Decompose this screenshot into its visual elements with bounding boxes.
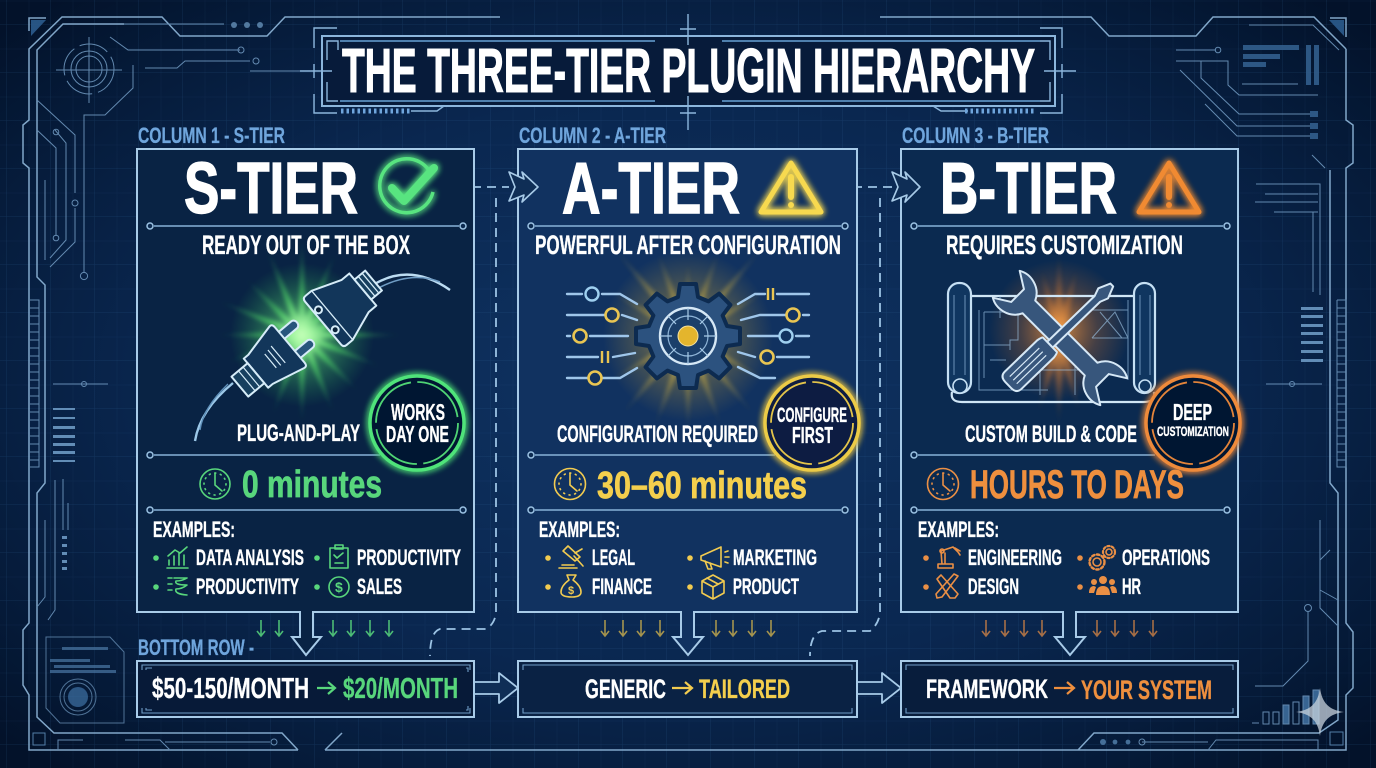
examples list: EXAMPLES:: [153, 517, 235, 542]
bottom box: cost: [137, 661, 474, 717]
setup time: [928, 463, 1184, 507]
left ladder strip: [30, 300, 39, 467]
bottom box: framework to your system: FRAMEWORK: [926, 674, 1048, 704]
setup time: 30–60 minutes: [597, 465, 807, 507]
icon: robot arm: [938, 547, 960, 568]
examples list: MARKETING: [733, 545, 817, 570]
gear: [636, 284, 740, 388]
examples list: HR: [1122, 574, 1141, 599]
small down arrows: B-tier: [982, 620, 1157, 636]
examples list: DATA ANALYSIS: [196, 545, 304, 570]
badge: deep customization: [1146, 376, 1240, 470]
illustration: blueprint and tools: [948, 251, 1155, 426]
caption: CONFIGURATION REQUIRED: [557, 421, 758, 448]
bottom box: generic to tailored: TAILORED: [699, 674, 790, 704]
icon: task list: [168, 578, 187, 595]
icon: box: [702, 575, 724, 599]
badge: works day one: DAY ONE: [386, 421, 449, 447]
panel: S-tier: [137, 149, 474, 655]
icon: green check circle: [380, 159, 434, 213]
examples list: [153, 517, 461, 599]
small down arrows: S-tier: [257, 620, 393, 636]
icon: people: [1089, 576, 1117, 595]
column label 1: COLUMN 1 - S-TIER: [138, 123, 285, 148]
S-tier heading: S-TIER: [184, 149, 358, 229]
bottom box: cost: $20/MONTH: [343, 673, 458, 705]
badge: deep customization: CUSTOMIZATION: [1157, 423, 1229, 439]
icon: megaphone: [701, 547, 729, 569]
flow arrow: A-tier to B-tier dashed: [810, 187, 892, 656]
icon: gavel: [559, 546, 583, 568]
bottom row label: BOTTOM ROW -: [138, 635, 254, 660]
flow arrow: S-tier to A-tier dashed: [430, 187, 509, 656]
icon: orange warning: [1139, 163, 1199, 212]
icon: clipboard: [330, 545, 348, 568]
bottom box: framework to your system: YOUR SYSTEM: [1081, 675, 1212, 705]
examples list: DESIGN: [968, 574, 1019, 599]
icon: money bag: [561, 575, 581, 597]
examples list: [539, 517, 817, 599]
setup time: [554, 465, 807, 507]
subtitle: POWERFUL AFTER CONFIGURATION: [535, 230, 841, 260]
chevron arrow into A-tier: [509, 172, 538, 202]
wrench: [991, 269, 1129, 407]
examples list: SALES: [357, 574, 402, 599]
A-tier heading: A-TIER: [562, 149, 740, 229]
arrow: cost to generic: [474, 673, 518, 703]
subtitle: REQUIRES CUSTOMIZATION: [946, 230, 1183, 260]
column label 3: COLUMN 3 - B-TIER: [902, 123, 1049, 148]
arrow: generic to framework: [857, 673, 901, 703]
illustration: gear and circuits: [567, 245, 809, 434]
examples list: PRODUCTIVITY: [357, 545, 461, 570]
icon: dollar: $: [335, 579, 343, 595]
examples list: FINANCE: [592, 574, 652, 599]
examples list: [918, 517, 1210, 599]
mini bar chart: [1252, 690, 1319, 724]
setup time: 0 minutes: [242, 464, 382, 506]
small down arrows: A-tier: [601, 620, 775, 636]
sparkle watermark: [1296, 688, 1344, 736]
bottom box: generic to tailored: GENERIC: [585, 674, 666, 704]
badge: configure first: CONFIGURE: [777, 404, 847, 427]
bottom box: framework to your system: [901, 661, 1238, 717]
icon: money bag: $: [568, 585, 574, 597]
caption: PLUG-AND-PLAY: [237, 420, 360, 447]
examples list: EXAMPLES:: [539, 517, 620, 542]
subtitle: READY OUT OF THE BOX: [202, 230, 410, 260]
column label 2: COLUMN 2 - A-TIER: [519, 123, 666, 148]
title banner: [300, 14, 1076, 130]
icon: dollar: [329, 577, 349, 597]
top right data block: [1243, 45, 1319, 139]
B-tier heading: B-TIER: [940, 149, 1117, 229]
icon: crossed ruler and pencil: [936, 574, 958, 598]
bottom left data panel: [46, 637, 124, 723]
icon: chart: [167, 547, 188, 568]
bottom box: generic to tailored: [518, 661, 857, 717]
examples list: EXAMPLES:: [918, 517, 999, 542]
badge: works day one: WORKS: [391, 399, 445, 425]
icon: gears: [1090, 546, 1115, 570]
chevron arrow into B-tier: [892, 172, 920, 202]
screwdriver: [1000, 276, 1120, 394]
examples list: LEGAL: [592, 545, 635, 570]
badge: works day one: [370, 376, 464, 470]
examples list: ENGINEERING: [968, 545, 1062, 570]
icon: yellow warning: [761, 163, 821, 212]
caption: CUSTOM BUILD & CODE: [965, 421, 1137, 448]
examples list: PRODUCT: [733, 574, 799, 599]
bottom box: cost: $50-150/MONTH: [152, 673, 309, 705]
setup time: HOURS TO DAYS: [970, 463, 1184, 507]
examples list: OPERATIONS: [1122, 545, 1210, 570]
badge: configure first: FIRST: [792, 422, 833, 448]
setup time: [200, 464, 382, 506]
right ladder strip: [1337, 300, 1346, 467]
panel: B-tier: [901, 149, 1240, 655]
examples list: PRODUCTIVITY: [196, 574, 299, 599]
corner target reticle: [56, 37, 122, 103]
illustration: plug and socket: [195, 235, 450, 441]
panel: A-tier: [518, 149, 859, 655]
badge: deep customization: DEEP: [1173, 399, 1212, 425]
badge: configure first: [765, 376, 859, 470]
